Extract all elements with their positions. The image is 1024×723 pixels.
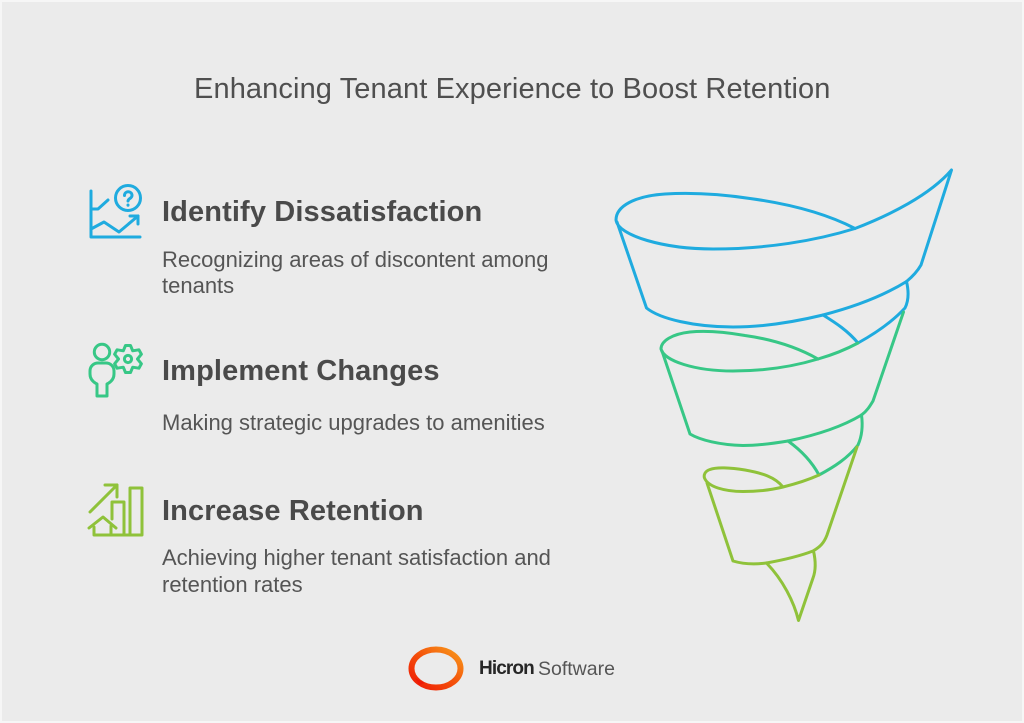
icon: house with rising bars (89, 485, 142, 535)
step 1 description: Recognizing areas of discontent among (162, 247, 548, 272)
logo: speech bubble ring (412, 650, 460, 688)
step 1 description: tenants (162, 273, 234, 298)
funnel: blue section (616, 170, 952, 343)
title: Enhancing Tenant Experience to Boost Retention (194, 73, 831, 105)
brand name: Software: Software (538, 658, 615, 680)
step 1 description (162, 247, 548, 298)
icon: person with gear (90, 344, 141, 396)
funnel: green section (661, 312, 904, 475)
step 2 heading: Implement Changes (162, 355, 440, 387)
step 1 heading: Identify Dissatisfaction (162, 196, 482, 228)
step 3 heading: Increase Retention (162, 495, 424, 527)
brand name: Hicron: Hicron (479, 658, 534, 679)
step 2 description: Making strategic upgrades to amenities (162, 410, 545, 435)
icon: chart with question mark (91, 186, 140, 237)
step 3 description (162, 545, 551, 597)
step 3 description: Achieving higher tenant satisfaction and (162, 545, 551, 570)
step 3 description: retention rates (162, 572, 303, 597)
funnel: lime section (704, 447, 857, 620)
